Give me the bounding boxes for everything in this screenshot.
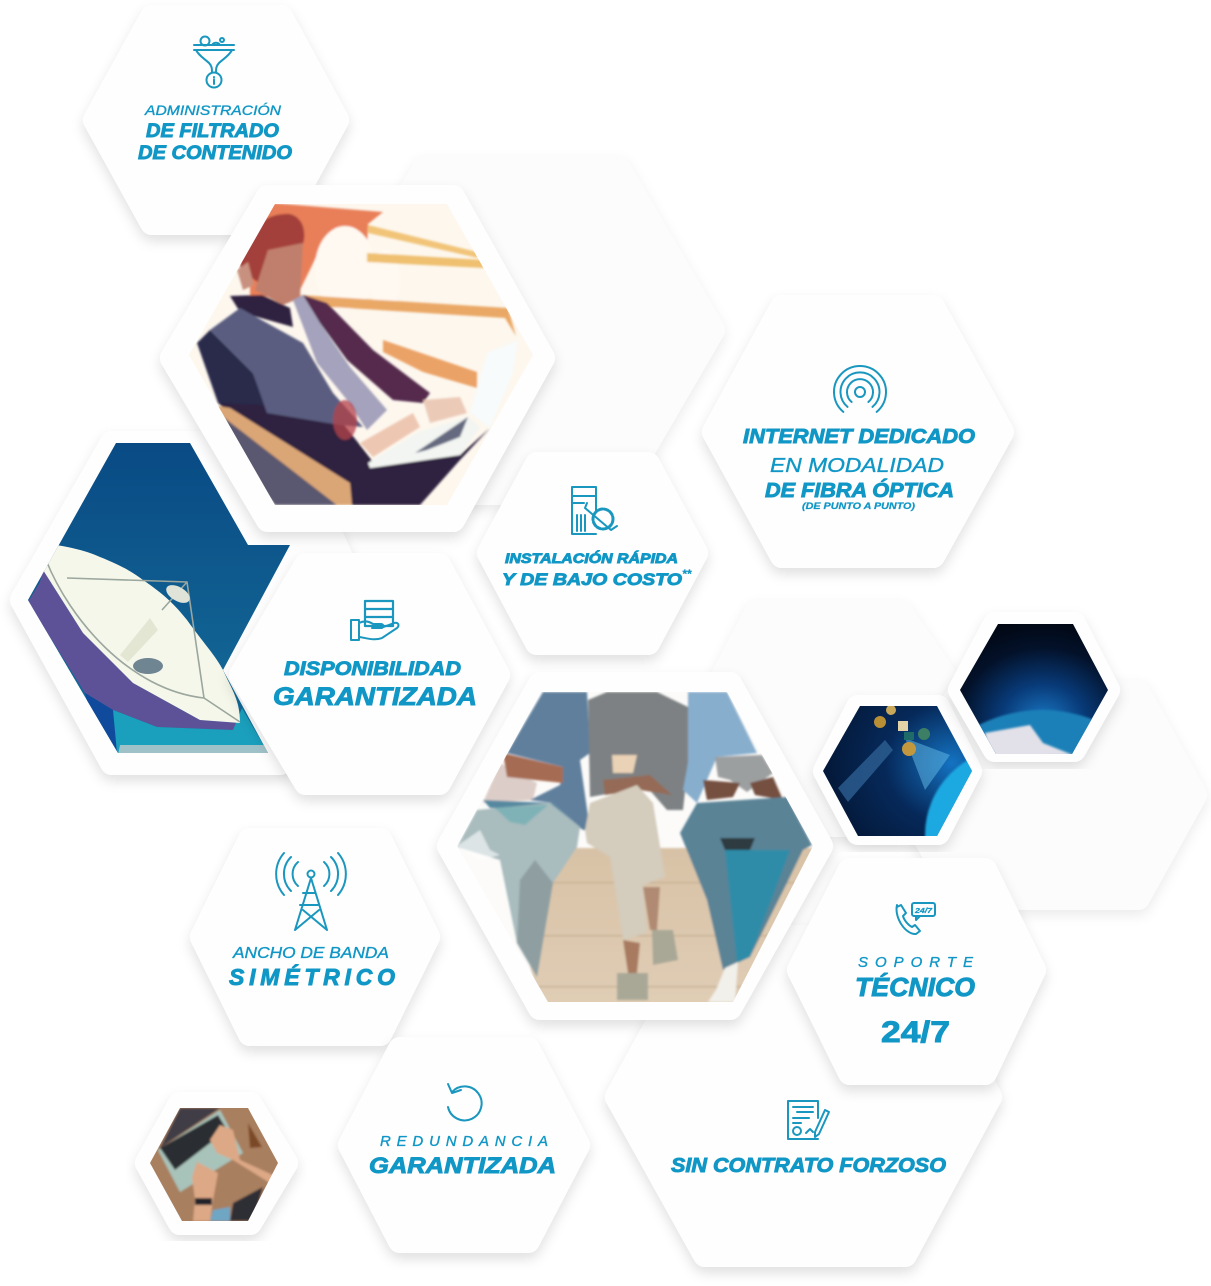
- text: redundancia garantizada: GARANTIZADA: [369, 1153, 556, 1178]
- panel: ancho de banda simétrico: [202, 840, 428, 1034]
- panel: laptop photo: [145, 1104, 286, 1225]
- text: soporte técnico 24/7: [855, 954, 975, 1049]
- photo: people with devices: [450, 688, 820, 1008]
- panel: earth from space photo: [946, 624, 1122, 769]
- icon: contract and pen: [788, 1101, 829, 1139]
- text: administración de filtrado de contenido: DE CONTENIDO: [138, 143, 292, 164]
- background hexagon upper right: [700, 612, 975, 825]
- text: soporte técnico 24/7: 24/7: [881, 1016, 950, 1049]
- text: disponibilidad garantizada: GARANTIZADA: [273, 683, 477, 711]
- panel: filtrado de contenido: [95, 17, 337, 223]
- text: disponibilidad garantizada: DISPONIBILIDAD: [284, 659, 461, 680]
- text: ancho de banda simétrico: SIMÉTRICO: [229, 963, 395, 990]
- text: administración de filtrado de contenido: [138, 102, 292, 164]
- icon: concentric signal: [834, 366, 886, 412]
- text: administración de filtrado de contenido: ADMINISTRACIÓN: [144, 102, 282, 118]
- icon: antenna tower: [276, 853, 346, 930]
- text inside 24/7 bubble: 24/7: [914, 908, 933, 915]
- text: internet dedicado en modalidad de fibra óptica: (DE PUNTO A PUNTO): [802, 501, 915, 512]
- text: internet dedicado en modalidad de fibra óptica: DE FIBRA ÓPTICA: [765, 478, 954, 502]
- photo: satellite dish: [20, 440, 300, 760]
- text: soporte técnico 24/7: TÉCNICO: [855, 972, 975, 1002]
- icon: hand holding server: [351, 601, 398, 640]
- text: instalación rápida y de bajo costo: INSTALACIÓN RÁPIDA: [505, 549, 678, 566]
- icon: funnel: [194, 36, 234, 88]
- panel: internet dedicado: [714, 307, 1002, 556]
- text: redundancia garantizada: [369, 1133, 556, 1178]
- text: ancho de banda simétrico: ANCHO DE BANDA: [232, 945, 389, 962]
- icon: reload arrow: [448, 1084, 482, 1120]
- icon: phone with 24/7 bubble: [897, 903, 935, 934]
- text: soporte técnico 24/7: SOPORTE: [858, 954, 974, 971]
- text: instalación rápida y de bajo costo: **: [682, 567, 693, 581]
- text: instalación rápida y de bajo costo: [502, 549, 693, 589]
- photo: satellite and earth: [823, 706, 972, 836]
- photo: hands on laptop: [150, 1108, 278, 1221]
- panel: instalación rápida: [489, 464, 696, 643]
- panel: sin contrato forzoso: [617, 937, 990, 1255]
- photo: earth from space: [960, 624, 1108, 754]
- panel: soporte técnico 24/7: [799, 870, 1034, 1073]
- text: internet dedicado en modalidad de fibra óptica: [743, 426, 975, 512]
- text: internet dedicado en modalidad de fibra óptica: EN MODALIDAD: [770, 455, 944, 477]
- text: redundancia garantizada: REDUNDANCIA: [380, 1133, 548, 1150]
- text: ancho de banda simétrico: [229, 945, 395, 990]
- panel: disponibilidad garantizada: [241, 565, 498, 783]
- text: administración de filtrado de contenido: DE FILTRADO: [146, 121, 279, 142]
- text: disponibilidad garantizada: [273, 659, 477, 711]
- text: sin contrato forzoso: SIN CONTRATO FORZOSO: [671, 1155, 946, 1177]
- panel: people with devices photo: [449, 684, 821, 1008]
- panel: man with laptop photo: [172, 197, 543, 520]
- panel: satellite dish photo: [20, 440, 360, 763]
- background hexagon behind man photo: [330, 168, 713, 493]
- photo: man with laptop: [180, 200, 540, 510]
- background hexagon far right: [900, 692, 1195, 898]
- icon: server and gears: [572, 487, 617, 534]
- text: internet dedicado en modalidad de fibra óptica: INTERNET DEDICADO: [743, 426, 975, 448]
- text: instalación rápida y de bajo costo: Y DE BAJO COSTO: [502, 570, 682, 589]
- panel: satellite photo: [810, 706, 984, 852]
- panel: redundancia garantizada: [350, 1049, 578, 1241]
